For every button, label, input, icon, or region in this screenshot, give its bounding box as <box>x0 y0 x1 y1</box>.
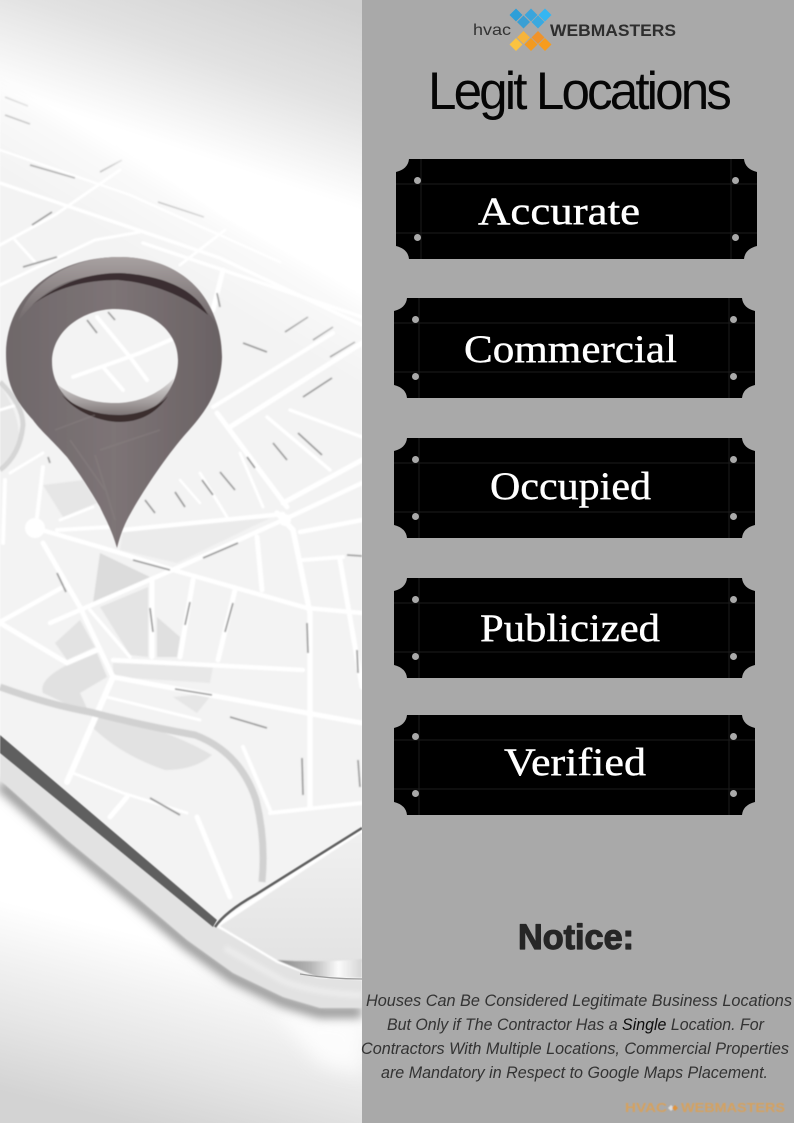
footer watermark <box>625 1101 785 1115</box>
plaque: Verified <box>394 715 755 815</box>
plaque: Accurate <box>396 159 757 259</box>
plaque: Commercial <box>394 298 755 398</box>
plaque: Verified: Verified <box>504 741 647 784</box>
phone bezel highlight <box>225 948 362 995</box>
phone reflection <box>270 1005 362 1075</box>
map river <box>0 687 263 882</box>
logo word: webmasters: WEBMASTERS <box>550 22 676 40</box>
logo word: hvac: hvac <box>473 22 511 39</box>
logo: hvac webmasters <box>473 8 676 51</box>
notice paragraph: But Only if The Contractor Has a Single Location. For <box>387 1015 765 1034</box>
icon: location pin <box>6 257 222 548</box>
phone lower right screen <box>220 832 362 964</box>
map street labels <box>5 97 362 815</box>
phone dark edge <box>0 735 217 927</box>
phone strip lower line <box>300 974 362 979</box>
notice paragraph <box>361 991 792 1082</box>
footer watermark: HVAC <box>625 1101 667 1115</box>
panel: right column <box>362 0 794 1123</box>
phone reflective strip <box>277 959 362 978</box>
plaque: Publicized <box>394 578 755 678</box>
plaque: Occupied <box>394 438 755 538</box>
map roads <box>0 150 362 897</box>
plaque: Publicized: Publicized <box>480 607 661 650</box>
notice paragraph: are Mandatory in Respect to Google Maps Placement. <box>381 1063 768 1082</box>
panel: map photo <box>0 0 362 1123</box>
heading: Notice: Notice: <box>518 918 634 957</box>
map parks and shaded blocks <box>42 654 106 708</box>
pin inner wall <box>58 378 174 420</box>
plaque: Accurate: Accurate <box>478 190 640 233</box>
title: Legit Locations <box>428 62 730 121</box>
footer watermark: WEBMASTERS <box>681 1101 785 1115</box>
plaque: Occupied: Occupied <box>490 465 652 508</box>
plaque: Commercial: Commercial <box>464 328 677 371</box>
phone drop shadow <box>0 784 362 1012</box>
phone bezel <box>0 750 362 1008</box>
phone map screen <box>0 70 362 922</box>
